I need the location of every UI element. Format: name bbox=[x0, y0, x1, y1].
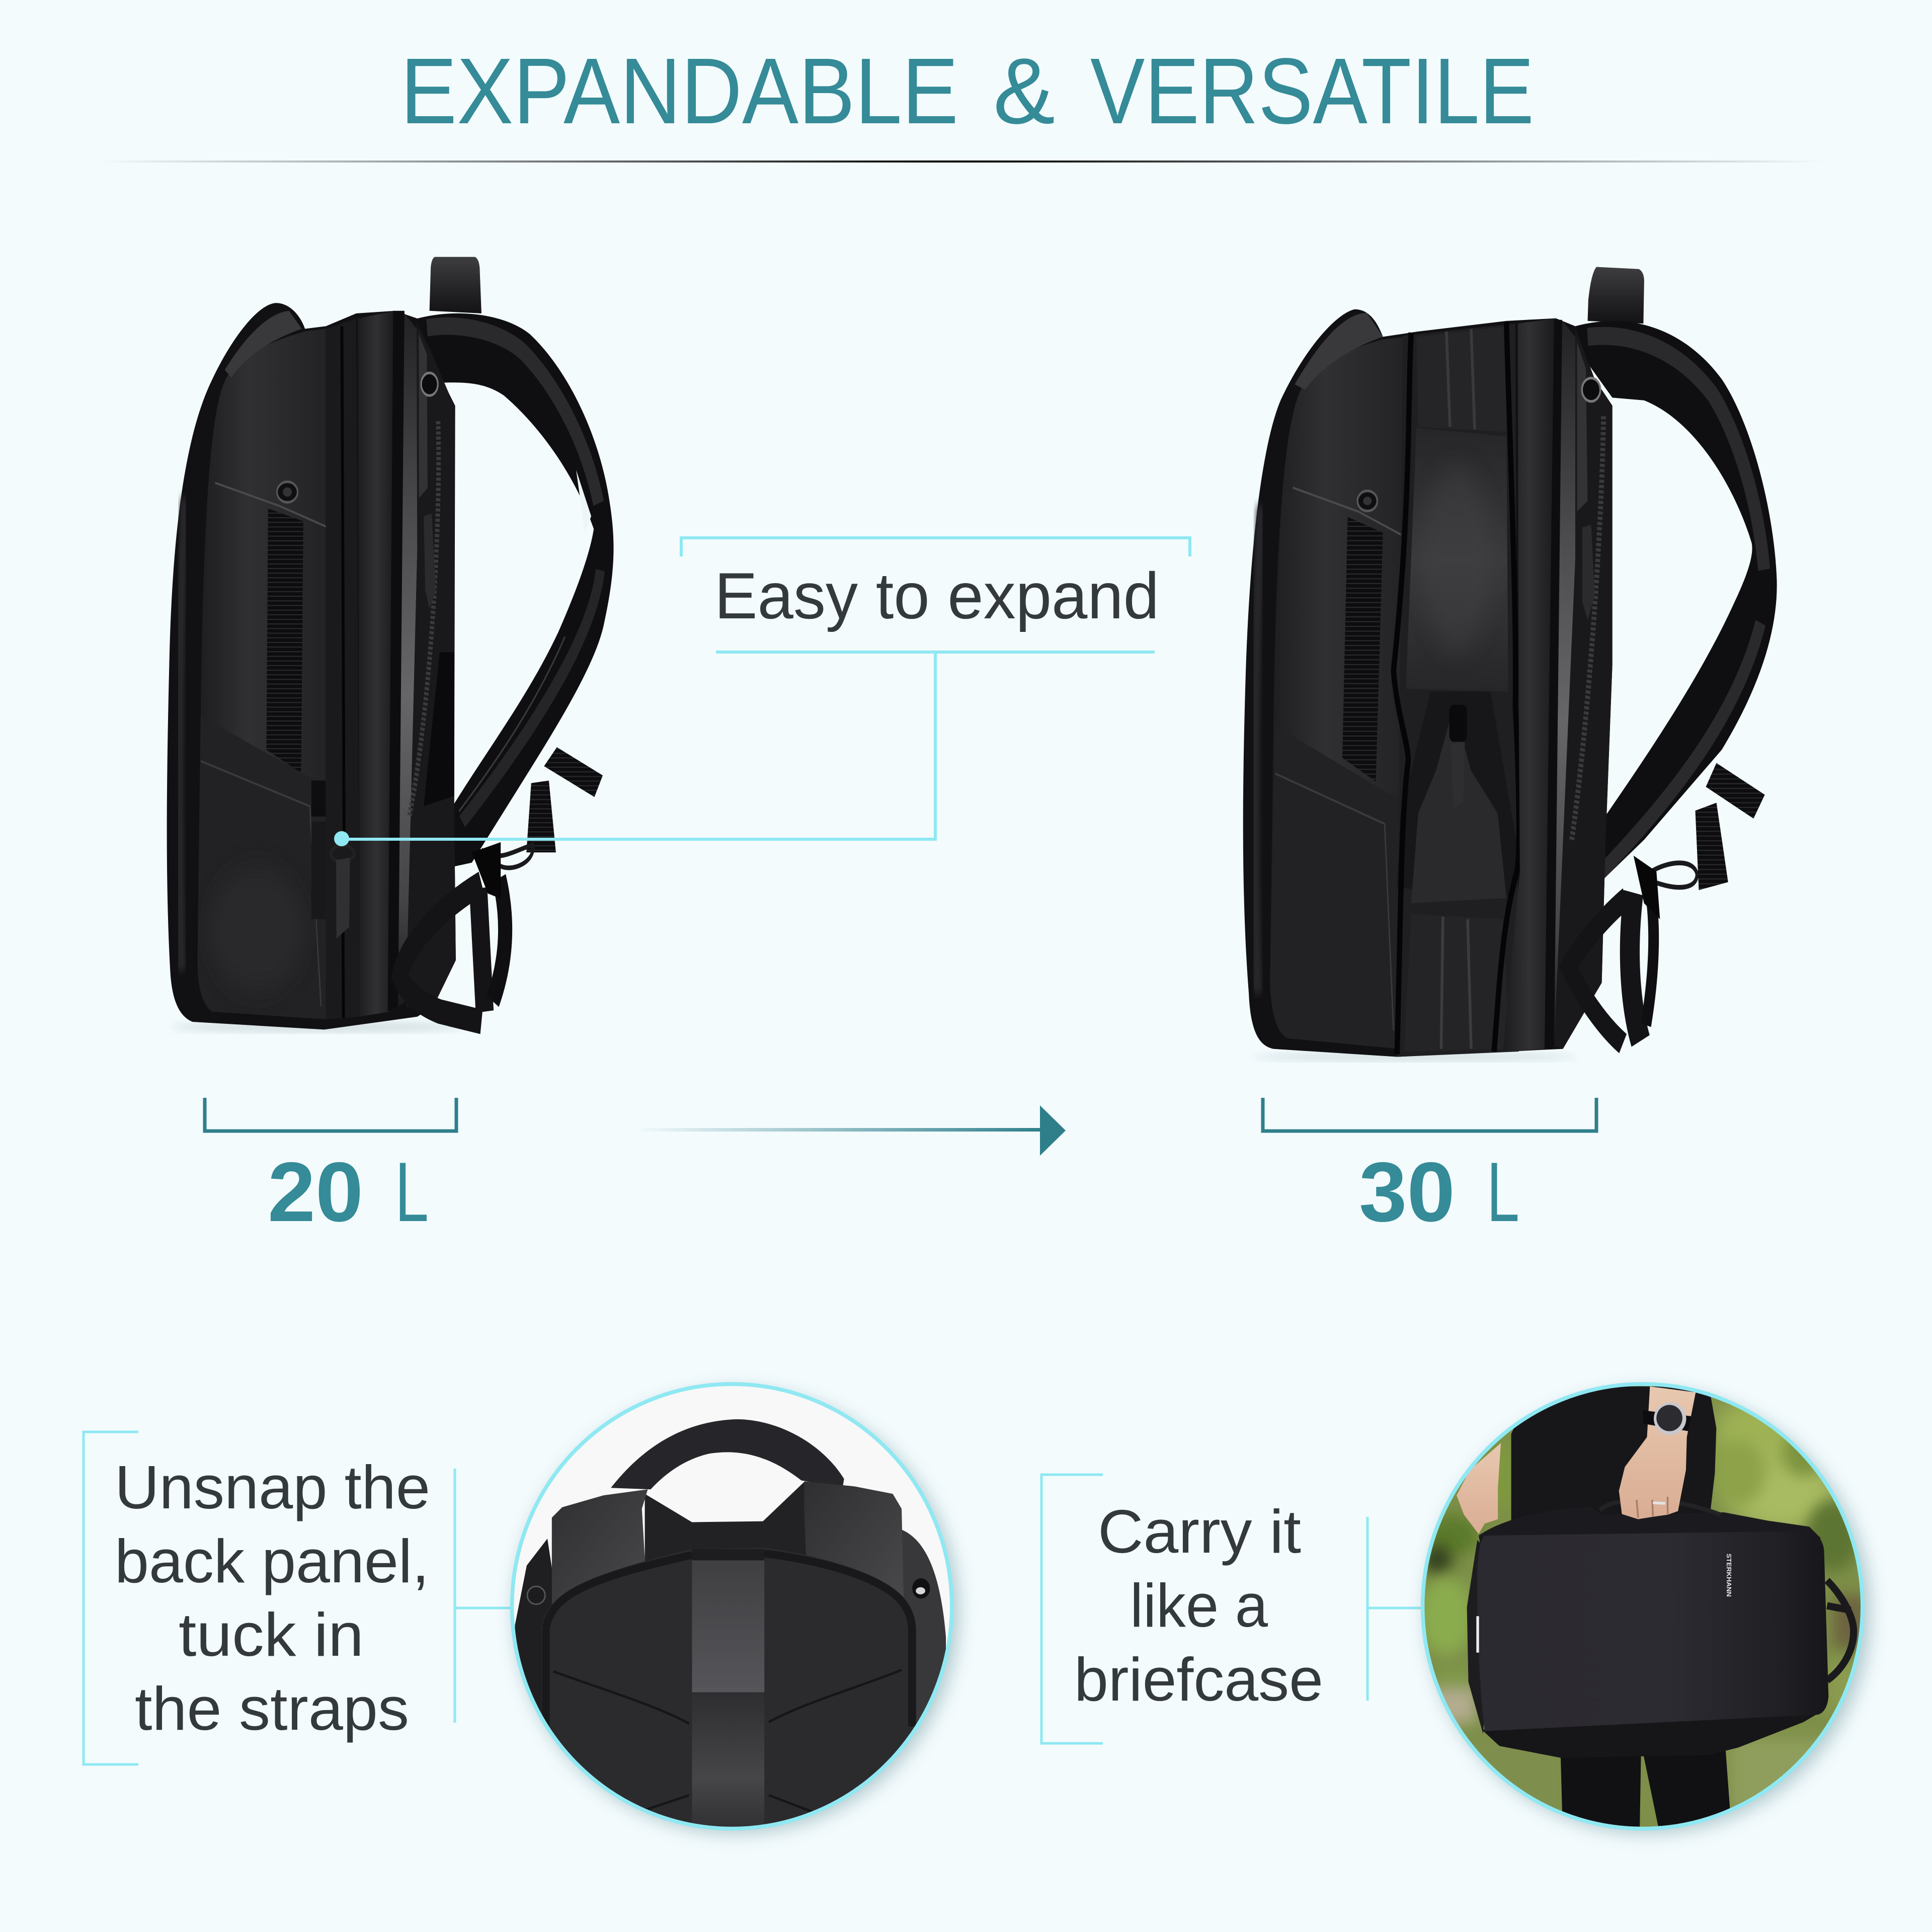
webbing loop bbox=[1342, 517, 1383, 781]
right strap bbox=[1827, 1580, 1854, 1680]
value 20 L: L bbox=[395, 1145, 429, 1239]
snap button bbox=[277, 482, 297, 502]
backpack: 30 L expanded side view bbox=[1243, 267, 1777, 1061]
lower zip pull bbox=[331, 845, 354, 939]
right panel bbox=[1503, 318, 1556, 1052]
person torso bbox=[1511, 1387, 1716, 1523]
text block: carry it like a briefcase bbox=[1041, 1475, 1422, 1743]
padded back panel bbox=[541, 1548, 916, 1836]
expansion zippers bbox=[1394, 333, 1411, 1054]
back side with mesh bbox=[1554, 329, 1613, 1049]
left hand bbox=[1457, 1443, 1501, 1534]
bag side bbox=[1467, 1540, 1485, 1734]
gusset with zipper pull bbox=[1397, 691, 1520, 898]
value 30 L bbox=[1359, 1145, 1519, 1239]
lower straps bbox=[399, 878, 505, 1022]
width bracket bbox=[1263, 1098, 1596, 1131]
callout text: Easy to expand bbox=[714, 559, 1159, 632]
title: & bbox=[993, 39, 1055, 143]
watch bbox=[1643, 1402, 1691, 1435]
copy bbox=[115, 1453, 430, 1743]
snap button bbox=[1357, 491, 1377, 511]
upper zip pull bbox=[424, 514, 436, 609]
cord loop bbox=[481, 845, 533, 868]
cord loop bbox=[1651, 863, 1697, 888]
reflective strip bbox=[1476, 1616, 1479, 1653]
photo circle: carried as briefcase bbox=[1414, 1369, 1877, 1836]
webbing loop bbox=[267, 509, 303, 773]
body silhouette bbox=[1243, 309, 1613, 1057]
shoulder strap bbox=[417, 313, 614, 873]
lower pocket bbox=[1270, 726, 1401, 1049]
title: VERSATILE bbox=[1090, 39, 1534, 143]
shoulder pads bbox=[552, 1489, 648, 1613]
middle panel bbox=[358, 311, 395, 1017]
photo circle: back panel bbox=[503, 1369, 966, 1836]
value 30 L: L bbox=[1487, 1145, 1519, 1239]
arrow bbox=[634, 1105, 1066, 1156]
grab handle bbox=[430, 257, 481, 313]
callout: easy to expand bbox=[334, 538, 1190, 846]
text block: unsnap the back panel bbox=[84, 1432, 511, 1764]
value 30 L: 30 bbox=[1359, 1145, 1455, 1239]
bag front face bbox=[1477, 1531, 1828, 1731]
zipper band bbox=[326, 318, 360, 1019]
title: EXPANDABLE bbox=[400, 39, 958, 143]
copy bbox=[1074, 1497, 1323, 1714]
body silhouette bbox=[167, 303, 456, 1029]
snaps bbox=[527, 1578, 930, 1604]
front panel bbox=[1270, 337, 1406, 1049]
leader line bbox=[342, 652, 1155, 839]
back side with mesh bbox=[406, 324, 456, 1006]
bracket bbox=[1041, 1475, 1422, 1743]
capacity: 30 L bbox=[1263, 1098, 1596, 1239]
width bracket bbox=[205, 1098, 456, 1131]
foliage background bbox=[1414, 1369, 1877, 1836]
shoulder strap bbox=[1566, 321, 1777, 898]
bag underside bbox=[1482, 1712, 1821, 1758]
callout bracket bbox=[681, 538, 1190, 556]
upper zip pull bbox=[1582, 525, 1595, 620]
value 20 L bbox=[268, 1145, 429, 1239]
value 20 L: 20 bbox=[268, 1145, 363, 1239]
copy: the straps bbox=[135, 1674, 409, 1743]
copy: Carry it bbox=[1098, 1497, 1301, 1566]
right hand bbox=[1619, 1387, 1696, 1519]
top handle bbox=[611, 1419, 844, 1489]
expansion panel bbox=[1397, 324, 1519, 1057]
bracket bbox=[84, 1432, 511, 1764]
copy: like a bbox=[1130, 1571, 1268, 1640]
copy: back panel, bbox=[115, 1527, 429, 1595]
copy: briefcase bbox=[1074, 1645, 1323, 1714]
weatherproof zip strip bbox=[388, 311, 405, 1012]
capacity: 20 L bbox=[205, 1098, 456, 1239]
trouser legs bbox=[1561, 1744, 1732, 1836]
backpack: 20 L side view bbox=[167, 257, 614, 1032]
centre strap bbox=[692, 1560, 764, 1693]
lower straps bbox=[1568, 877, 1654, 1043]
grab handle bbox=[1588, 267, 1644, 324]
bag top with handle bbox=[1479, 1507, 1821, 1545]
weatherproof zip strip bbox=[1545, 320, 1562, 1049]
brand label: STERKHANN bbox=[1725, 1554, 1732, 1597]
centre yoke bbox=[645, 1482, 807, 1563]
bag sides bbox=[515, 1539, 553, 1727]
side strap tab bbox=[1706, 763, 1765, 819]
lower pocket bbox=[197, 716, 326, 1019]
copy: Unsnap the bbox=[115, 1453, 430, 1521]
title bbox=[400, 39, 1534, 143]
copy: tuck in bbox=[179, 1600, 364, 1669]
front panel bbox=[197, 329, 326, 1019]
side strap tab bbox=[544, 747, 603, 797]
leader dot bbox=[334, 831, 349, 846]
